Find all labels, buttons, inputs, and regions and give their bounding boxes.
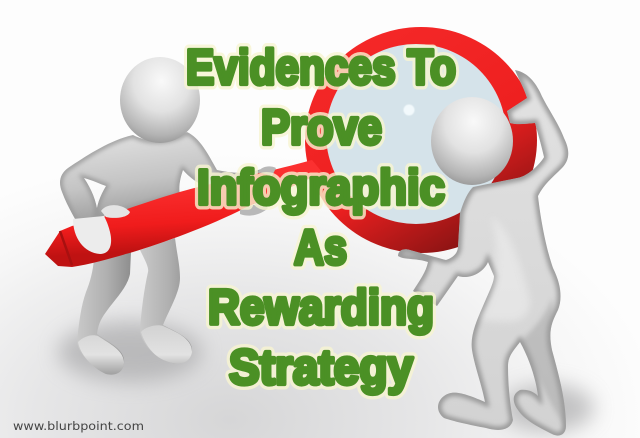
left figure feet highlight — [78, 325, 192, 374]
title lettering: Prove — [261, 101, 382, 155]
title halo: As — [294, 221, 347, 275]
left figure back leg — [140, 238, 192, 363]
right figure — [398, 70, 568, 436]
title — [186, 41, 456, 395]
left figure head — [120, 57, 200, 143]
left figure front leg — [77, 252, 131, 375]
title lettering: Infographic — [197, 161, 445, 215]
left figure torso and arm — [60, 132, 261, 219]
right figure body — [398, 70, 568, 436]
title halo: Rewarding — [208, 281, 434, 335]
title lettering — [186, 41, 456, 395]
title halo: Strategy — [229, 341, 413, 395]
title lettering: Evidences To — [186, 41, 456, 95]
title lettering: Rewarding — [208, 281, 434, 335]
left figure — [45, 57, 322, 375]
website url: www.blurbpoint.com — [13, 419, 144, 433]
title halo: Prove — [261, 101, 382, 155]
marker tip groove — [60, 231, 72, 265]
title lettering: As — [294, 221, 347, 275]
title halo — [186, 41, 456, 395]
title halo: Infographic — [197, 161, 445, 215]
left figure upper hand — [101, 205, 130, 218]
magnifying glass lens and ring — [305, 27, 537, 253]
title halo: Evidences To — [186, 41, 456, 95]
left figure right hand — [240, 166, 276, 216]
left figure lower hand — [73, 216, 111, 254]
title lettering: Strategy — [229, 341, 413, 395]
red marker handle — [45, 160, 322, 267]
right figure head — [431, 97, 513, 185]
ground shadows — [58, 322, 594, 432]
